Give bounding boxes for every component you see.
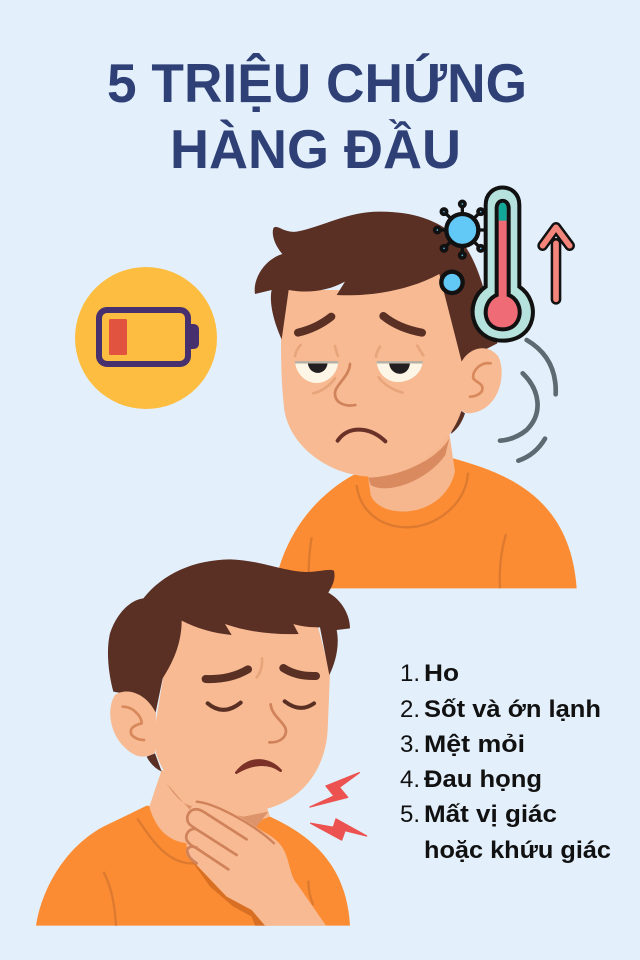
dizziness lines — [500, 340, 556, 461]
forehead crease — [257, 658, 262, 677]
closed eyes — [208, 701, 314, 710]
eyes — [295, 362, 338, 383]
ear — [110, 691, 156, 757]
hair — [255, 212, 497, 362]
icon: pain bolts — [310, 773, 367, 840]
face — [153, 620, 330, 812]
nose — [335, 364, 355, 405]
symptom list: Ho — [424, 660, 459, 687]
back hair lower — [451, 410, 465, 434]
mouth — [338, 430, 385, 441]
icon: thermometer — [473, 187, 533, 341]
symptom list: 5. — [400, 801, 420, 828]
symptom list: 1. — [400, 660, 420, 687]
symptom list: 2. — [400, 696, 420, 723]
symptom list: Mất vị giác — [424, 801, 557, 828]
title: 5 TRIỆU CHỨNG — [107, 52, 527, 114]
shirt — [274, 458, 577, 588]
ear — [460, 348, 502, 413]
illustration: tired man with fever — [255, 187, 577, 588]
neck — [149, 770, 270, 843]
symptom list: Đau họng — [424, 766, 542, 793]
title: HÀNG ĐẦU — [170, 118, 461, 180]
symptom list: Mệt mỏi — [424, 731, 525, 758]
mouth — [236, 760, 281, 773]
shirt — [36, 806, 350, 926]
eyebrows — [206, 668, 316, 679]
symptom list: Sốt và ớn lạnh — [424, 696, 601, 723]
title — [107, 52, 527, 180]
symptom list: 3. — [400, 731, 420, 758]
symptom list — [400, 660, 611, 864]
face — [281, 270, 467, 477]
icon: low battery — [75, 267, 217, 409]
icon: virus — [435, 201, 491, 293]
hand — [186, 801, 326, 926]
neck — [367, 433, 455, 512]
symptom list: hoặc khứu giác — [424, 837, 611, 864]
eyebrows — [298, 316, 422, 333]
hair back — [147, 753, 162, 772]
icon: up arrow — [543, 227, 570, 299]
illustration: man with sore throat — [36, 559, 367, 926]
hair — [108, 559, 350, 714]
nose — [269, 704, 286, 742]
symptom list: 4. — [400, 766, 420, 793]
face creases — [295, 345, 423, 393]
